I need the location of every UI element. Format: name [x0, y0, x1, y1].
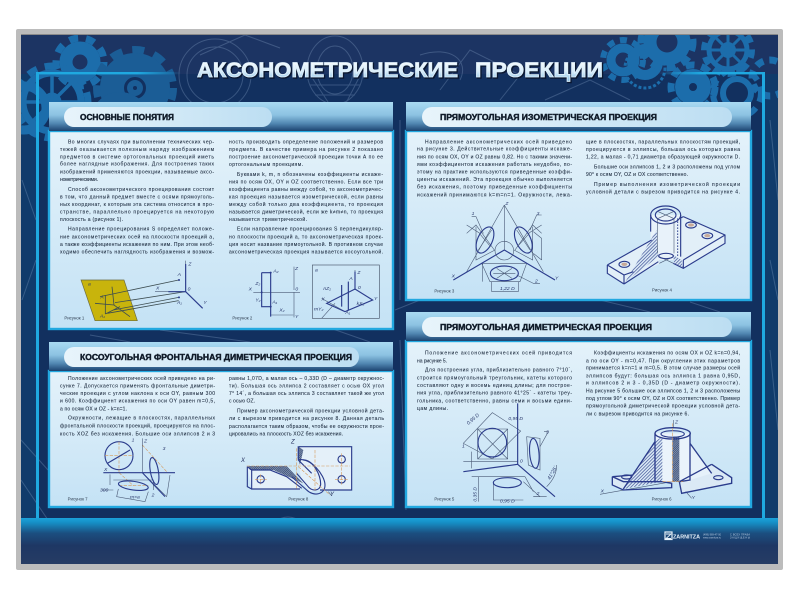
text: basic concepts right column: коэффициента равны между собой, то аксонометричес-: [229, 186, 383, 193]
heading: oblique dimetric: КОСОУГОЛЬНАЯ ФРОНТАЛЬНАЯ ДИМЕТРИЧЕСКАЯ ПРОЕКЦИЯ: [80, 353, 352, 362]
figure 7: [68, 438, 175, 502]
text: oblique left column: [60, 375, 216, 437]
text: basic concepts left column: Способ аксонометрического проецирования состоит: [68, 187, 215, 193]
text: basic concepts right column: ция носит название прямоугольной. В противном случае: [229, 241, 383, 248]
panel: oblique frontal dimetric projection: [49, 342, 393, 507]
figure 2: axonometric box: nZ₂: [323, 286, 331, 292]
text: basic concepts left column: нометрическими.: [60, 177, 98, 183]
figure 7: X: [103, 467, 108, 473]
footer band: [21, 518, 778, 564]
figure 8: Y: [330, 492, 335, 498]
figure 1: A: [99, 294, 104, 300]
text: oblique right column: 7° 14´, а большая ось эллипса 3 составляет такой же угол: [229, 390, 384, 397]
figure 3: Y: [555, 275, 559, 281]
figure 2: Z: [294, 266, 299, 272]
figure 6: Z: [674, 419, 679, 425]
gears: upper right: [600, 35, 778, 116]
text: isometric left column: Направление аксонометрических осей приведено: [425, 138, 572, 145]
text: basic concepts left column: в том, что данный предмет вместе с осями прямоуголь-: [60, 193, 214, 200]
figure 2: axonometric box: 0: [358, 285, 361, 291]
text: oblique left column: фронтальной плоскости проекций, проецируются на плос-: [60, 422, 215, 429]
figure 5: [434, 403, 559, 504]
text: dimetric left column: ния угла, приблизительно равного 41°25´ - катеты треу-: [417, 391, 572, 397]
text: oblique right column: [229, 376, 384, 438]
figure 5: 2: [536, 491, 540, 497]
figure 3: 1,22 D: [500, 286, 515, 292]
figure 2: axonometric box: X: [320, 297, 325, 303]
figure 5: 1: [462, 444, 465, 450]
figure 4: Рисунок 4: [652, 288, 673, 293]
text: dimetric left column: на рисунке 5.: [417, 359, 447, 365]
figure 5: 3: [546, 429, 549, 435]
text: oblique right column: ти). Большая ось эллипса 2 составляет с осью ОХ угол: [229, 383, 384, 389]
figure 1: Z: [187, 262, 192, 268]
text: oblique left column: кость XOZ без искажения. Большие оси эллипсов 2 и 3: [60, 431, 215, 437]
text: oblique right column: цировались на плоскость XOZ без искажения.: [229, 432, 343, 438]
figure 5: 0,95 D: [508, 416, 523, 422]
figure 2: axonometric box: mY₂: [314, 307, 323, 313]
text: basic concepts right column: называется триметрической.: [229, 216, 307, 223]
figure 6: [600, 419, 732, 501]
text: isometric right column: 1,22, а малая - 0,71 диаметра образующей окружности D.: [586, 153, 740, 160]
figure 7: Рисунок 7: [68, 497, 88, 502]
figure 7: 3: [163, 446, 166, 452]
text: isometric left column: ями коэффициентов искажения работать неудобно, по-: [417, 162, 572, 168]
text: basic concepts left column: Во многих случаях при выполнении технических чер-: [68, 139, 214, 145]
figure 2: axonometric box: a: [315, 268, 318, 274]
logo: Zarnitza: [665, 532, 751, 540]
text: dimetric right column: прямоугольной диметрической проекции условной дета-: [586, 403, 740, 410]
logo: Zarnitza: (499) 969-47-00: [703, 534, 722, 536]
figure 2: Z₂: [254, 281, 260, 287]
text: isometric left column: искажений принимаются k=m=n=1. Окружности, лежа-: [417, 191, 572, 198]
logo: Zarnitza: ЗАЩИЩЕНЫ: [730, 537, 751, 540]
title: АКСОНОМЕТРИЧЕСКИЕ: [198, 60, 459, 83]
text: basic concepts right column: аксонометрическая проекция называется косоугольной.: [229, 249, 383, 256]
figure 1: A: [177, 272, 182, 278]
text: basic concepts right column: ность производить определение положений и размеров: [229, 138, 383, 145]
text: oblique left column: сунке 7. Допускается применять фронтальные диметри-: [60, 384, 215, 390]
text: isometric right column: [586, 138, 741, 196]
panel: rectangular dimetric projection: [406, 312, 751, 507]
figure 7: m×a: [130, 494, 140, 500]
text: oblique right column: с осью OZ.: [229, 399, 255, 405]
title: ПРОЕКЦИИ: [475, 59, 603, 82]
text: isometric right column: проецируются в эллипсы, большая ось которых равна: [586, 147, 740, 153]
cyan frame lines: [36, 72, 765, 518]
text: isometric right column: Пример выполнения изометрической проекции: [594, 181, 740, 188]
figure 7: Z: [143, 438, 148, 444]
text: basic concepts right column: ортогональным проекциям.: [229, 162, 303, 168]
figure 2: axonometric box: Z: [356, 270, 361, 276]
panel: basic concepts: [49, 102, 393, 329]
text: isometric right column: щие в плоскостях, параллельных плоскостям проекций,: [586, 138, 740, 145]
title: [197, 59, 604, 83]
text: isometric left column: циенты искажений. Эта проекция обычно выполняется: [417, 176, 572, 183]
text: oblique right column: Пример аксонометрической проекции условной дета-: [237, 407, 384, 414]
figure 3: 3: [537, 211, 540, 217]
figure 1: A₁: [99, 313, 105, 319]
text: basic concepts right column: предмета. В качестве примера на рисунке 2 показано: [229, 147, 383, 153]
text: dimetric left column: составляют одну и восемь единиц длины; для построе-: [417, 383, 572, 389]
text: isometric left column: на рисунке 3. Действительные коэффициенты искаже-: [417, 146, 572, 153]
panel: rectangular isometric projection: [406, 102, 751, 300]
text: isometric left column: ния по осям OX, OY и OZ равны 0,82. Но с такими значени-: [417, 154, 572, 160]
text: oblique left column: ческие проекции с углом наклона к оси OY, равным 300: [60, 391, 215, 397]
logo: Zarnitza: С ВСЕХ ПРАВА: [730, 534, 750, 536]
text: dimetric right column: и эллипсов 2 и 3 - 0,35D (D - диаметр окружности).: [586, 381, 740, 387]
text: dimetric left column: строится прямоугольный треугольник, катеты которого: [417, 374, 572, 381]
text: isometric right column: условной детали с вырезом приводится на рисунке 4.: [586, 189, 740, 196]
text: dimetric left column: цам длины.: [417, 406, 448, 412]
figure 2: X: [248, 287, 253, 293]
text: isometric right column: 90° к осям OY, OZ и OX соответственно.: [586, 172, 688, 178]
figure 6: Y: [692, 495, 696, 501]
text: isometric left column: [417, 138, 572, 198]
figure 2: 0: [295, 287, 298, 293]
figure 2: Рисунок 2: [232, 316, 253, 321]
figure 1: a: [88, 282, 91, 288]
figure 5: 0: [520, 458, 523, 464]
figure 8: X: [240, 458, 246, 464]
text: oblique right column: располагается таким образом, чтобы ее окружности прое-: [229, 424, 384, 430]
figure 7: 300: [100, 488, 109, 494]
title: АКСОНОМЕТРИЧЕСКИЕ: [197, 59, 458, 82]
figure 8: [240, 439, 352, 502]
text: dimetric left column: [417, 350, 572, 412]
text: basic concepts right column: ния по осям OX, OY и OZ соответственно. Если все три: [229, 179, 383, 185]
text: basic concepts right column: между собой только два коэффициента, то проекция: [229, 201, 383, 208]
text: dimetric left column: гольника, соответственно, равны семи и восьми едини-: [417, 398, 572, 404]
figure 8: Z: [290, 439, 295, 445]
heading: rectangular dimetric: ПРЯМОУГОЛЬНАЯ ДИМЕТРИЧЕСКАЯ ПРОЕКЦИЯ: [440, 323, 652, 332]
figure 2: X₂: [278, 307, 285, 313]
text: basic concepts left column: плоскость а (рисунок 1).: [60, 217, 123, 223]
figure 5: 0,35 D: [473, 487, 479, 502]
figure 2: A₂: [272, 269, 279, 275]
text: basic concepts left column: ных координат, к которым эта система относится в про-: [60, 202, 214, 208]
figure 5: 0,95 D: [500, 498, 515, 504]
figure 2: axonometric box: kX₂: [357, 301, 364, 307]
heading: basic concepts: ОСНОВНЫЕ ПОНЯТИЯ: [80, 113, 174, 122]
figure 2: Y: [295, 314, 299, 320]
figure 7: 1: [132, 438, 135, 444]
figure 3: Z: [504, 201, 509, 207]
figure 1: A₁: [176, 300, 182, 306]
text: basic concepts right column: Буквами k, m, n обозначены коэффициенты искаже-: [237, 172, 383, 178]
text: dimetric right column: Коэффициенты искажения по осям OX и OZ k=n=0,94,: [594, 351, 740, 357]
text: isometric left column: этому на практике используются приведенные коэффи-: [417, 170, 572, 176]
text: dimetric right column: а по оси OY - m=0,47. При округлении этих параметров: [586, 358, 740, 364]
text: basic concepts right column: [229, 138, 383, 256]
text: basic concepts left column: Направление проецирования S определяет положе-: [68, 226, 214, 232]
text: dimetric right column: ли с вырезом приводится на рисунке 6.: [586, 411, 689, 417]
figure 2: Y₂: [255, 298, 261, 304]
text: isometric left column: без искажения, поэтому приведенные коэффициенты: [417, 184, 572, 190]
figure 1: Y: [203, 300, 207, 306]
figure 3: [434, 201, 559, 293]
figure 2: axonometric box: A₁: [344, 310, 351, 316]
text: basic concepts left column: изображений применяются проекции, называемые аксо-: [60, 168, 214, 175]
text: basic concepts left column: ходимо обеспечить наглядность изображения и возмож-: [60, 250, 214, 256]
figure 7: 2: [151, 493, 155, 499]
text: dimetric left column: Для построения угла, приблизительно равного 7°10´,: [425, 368, 572, 374]
heading: rectangular isometric: ПРЯМОУГОЛЬНАЯ ИЗОМЕТРИЧЕСКАЯ ПРОЕКЦИЯ: [440, 113, 657, 122]
figure 4: [607, 206, 725, 293]
text: oblique left column: и 600. Коэффициент искажения по оси OY равен m=0,5,: [60, 399, 215, 405]
text: basic concepts left column: а также коэффициенты искажения по ним. При этом необ-: [60, 242, 214, 248]
figure 1: X: [155, 285, 160, 291]
figure 5: 0,95 D: [466, 412, 481, 427]
figure 6: X: [600, 488, 605, 494]
text: basic concepts left column: тежей оказывается полезным наряду изображением: [60, 146, 215, 153]
figure 2: axonometric box: A: [348, 276, 353, 282]
figure 3: Рисунок 3: [434, 288, 455, 293]
figure 5: Рисунок 5: [434, 496, 455, 501]
text: basic concepts right column: но плоскости проекций а, то аксонометрическая проек-: [229, 233, 383, 240]
text: dimetric right column: эллипсов будут: большая ось эллипса 1 равна 0,95D,: [586, 373, 740, 379]
text: basic concepts left column: странстве, параллельно проецируется на некоторую: [60, 210, 214, 216]
figure 3: 2: [534, 279, 538, 285]
text: oblique left column: Окружности, лежащие в плоскостях, параллельных: [68, 416, 216, 422]
figure 3: 1: [472, 211, 475, 217]
figure 1: Рисунок 1: [64, 316, 85, 321]
figure 1: 0: [188, 287, 191, 293]
text: basic concepts left column: предметов в системе ортогональных проекций иметь: [60, 153, 214, 160]
text: oblique left column: а по осям OX и OZ - k=n=1.: [60, 407, 127, 413]
text: dimetric right column: принимается k=n=1 и m=0,5. В этом случае размеры осей: [586, 364, 740, 371]
text: oblique right column: равны 1,07D, а малая ось – 0,33D (D – диаметр окружнос-: [229, 376, 384, 382]
text: basic concepts right column: Если направление проецирования S перпендикуляр-: [237, 226, 383, 232]
figure 5: 41°25´: [547, 465, 559, 481]
text: basic concepts left column: ние аксонометрических осей на плоскости проекций а,: [60, 233, 214, 240]
text: oblique right column: ли с вырезом приводится на рисунке 8. Данная деталь: [229, 416, 384, 422]
text: oblique left column: Положение аксонометрических осей приведено на ри-: [68, 375, 215, 382]
figure 2: A₁: [271, 299, 278, 305]
figure 3: X: [451, 273, 456, 279]
gears: upper left: [2, 38, 173, 144]
text: dimetric right column: под углом 90° к осям OY, OZ и OX соответственно. Пример: [586, 396, 740, 402]
figure 8: Рисунок 8: [288, 497, 309, 502]
text: dimetric left column: Положение аксонометрических осей приводится: [425, 350, 572, 357]
text: dimetric right column: [586, 351, 740, 417]
text: basic concepts left column: более наглядные изображения. Для построения таких: [60, 162, 214, 168]
text: basic concepts right column: называется диметрической, если же k≠m≠n, то проекция: [229, 208, 383, 215]
logo: Zarnitza: ZARNITZA: [673, 534, 700, 540]
text: isometric right column: Большие оси эллипсов 1, 2 и 3 расположены под углом: [594, 164, 741, 170]
text: dimetric right column: На рисунке 5 большие оси эллипсов 1, 2 и 3 расположены: [586, 388, 740, 394]
title: ПРОЕКЦИИ: [476, 60, 604, 83]
figure 6: Рисунок 6: [652, 496, 672, 501]
text: basic concepts right column: кая проекция называется изометрической, если равны: [229, 193, 383, 200]
text: basic concepts left column: [60, 139, 215, 256]
figure 2: axonometric box: Y: [374, 296, 378, 302]
figure 1: [64, 261, 207, 321]
text: basic concepts right column: построение аксонометрической проекции точки А по ее: [229, 153, 383, 160]
figure 2: axonometric box: [312, 265, 379, 318]
figure 2: [232, 266, 300, 321]
logo: Zarnitza: www.zarnitza.ru: [703, 537, 722, 540]
